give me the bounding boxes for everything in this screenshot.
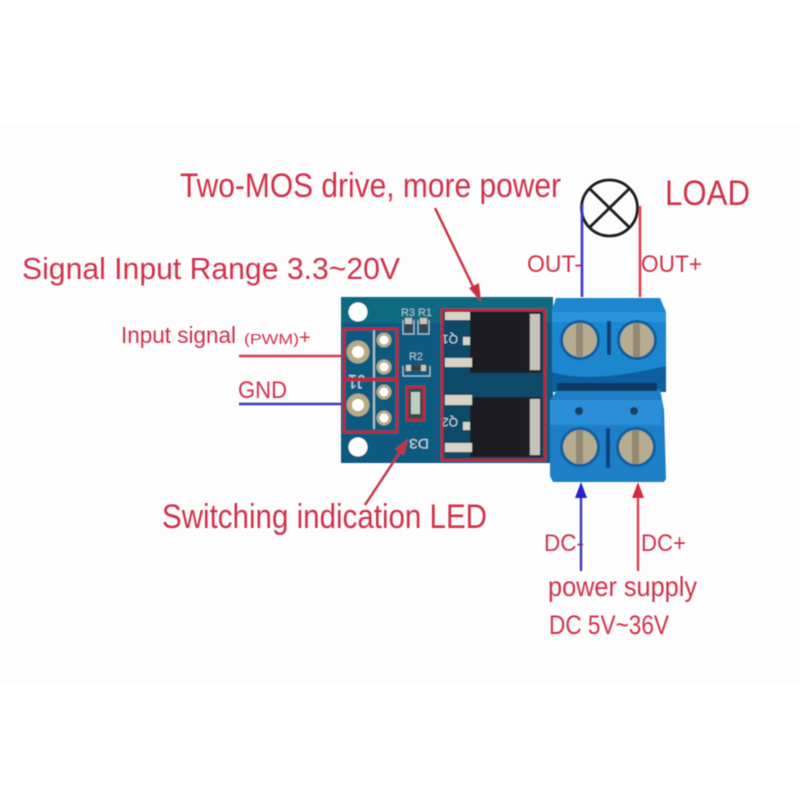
wire: input signal — [239, 355, 343, 357]
wire: ground — [239, 403, 343, 405]
MOSFET Q1: Q1 — [442, 332, 458, 346]
arrow: two-MOS to board — [435, 208, 481, 302]
label: DC minus: DC- — [544, 530, 584, 557]
resistors R1 R2 R3 — [401, 307, 432, 376]
wire: out minus — [581, 205, 583, 297]
heading: signal input range: Signal Input Range 3.3~20V — [22, 251, 400, 286]
screws — [560, 407, 656, 468]
label: input signal: (PWM) — [244, 331, 299, 348]
label: OUT minus: OUT- — [527, 251, 582, 278]
arrow: LED label to LED — [365, 439, 408, 505]
arrow: DC minus — [575, 482, 587, 571]
resistors R1 R2 R3: R3 — [401, 307, 415, 319]
label: input signal: + — [299, 327, 311, 349]
LED — [407, 388, 423, 419]
label: switching indication LED: Switching indication LED — [162, 498, 487, 536]
arrow: DC plus — [632, 482, 644, 571]
wire: out plus — [639, 206, 641, 297]
header pins J1 — [346, 330, 392, 429]
circuit board — [341, 297, 553, 463]
terminal block: output — [552, 298, 666, 392]
MOSFET Q2 — [442, 395, 542, 457]
label: GND: GND — [238, 377, 287, 404]
MOSFET Q2: Q2 — [442, 415, 458, 429]
label: DC voltage range: DC 5V~36V — [549, 610, 669, 640]
MOSFET Q1 — [442, 312, 542, 373]
terminal block: supply — [550, 383, 666, 482]
label: power supply: power supply — [548, 571, 697, 602]
board mounting holes — [348, 302, 368, 456]
header pins J1: J1 — [348, 370, 365, 391]
red outlines — [344, 310, 545, 460]
label: input signal: Input signal — [121, 322, 236, 348]
icon: lamp load symbol — [582, 180, 638, 236]
label: load: LOAD — [665, 174, 750, 213]
label: OUT plus: OUT+ — [641, 251, 702, 278]
heading: two-MOS drive: Two-MOS drive, more power — [180, 167, 561, 205]
resistors R1 R2 R3: R2 — [409, 351, 423, 363]
label: DC plus: DC+ — [641, 530, 686, 557]
silk label D3: D3 — [409, 436, 429, 452]
label: input signal — [121, 322, 311, 349]
screws — [560, 320, 657, 360]
resistors R1 R2 R3: R1 — [418, 307, 432, 319]
